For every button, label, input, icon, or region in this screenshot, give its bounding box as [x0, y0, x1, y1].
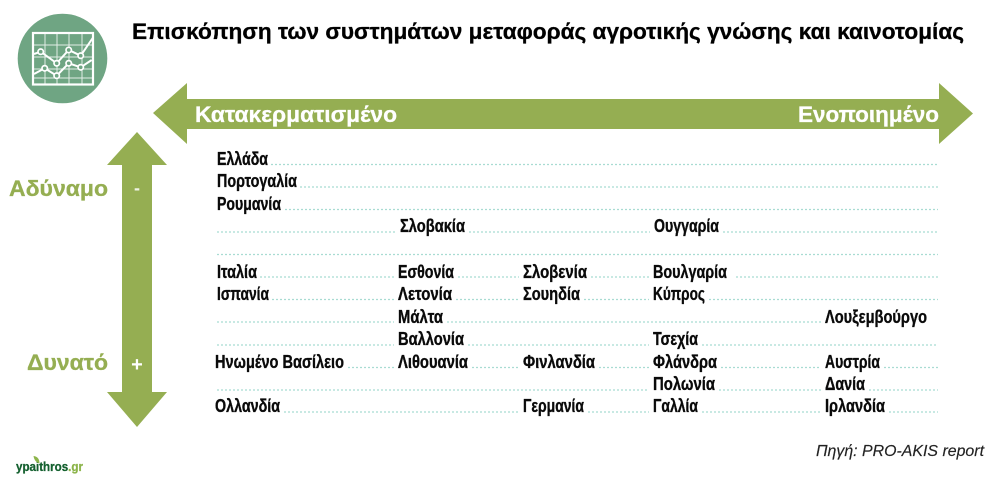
arrow: weak to strong axis [107, 132, 167, 427]
country names matrix: Λουξεμβούργο [825, 307, 927, 328]
logo: ypaithros.gr: ypaithros.gr [16, 459, 83, 474]
label: strong: Δυνατό [27, 350, 108, 375]
country names matrix: Βαλλονία [398, 329, 464, 349]
country names matrix: Ολλανδία [215, 396, 280, 416]
country names matrix: Σλοβακία [400, 216, 465, 236]
country names matrix: Ιρλανδία [825, 396, 885, 416]
arrow: fragmented to unified axis [153, 83, 973, 144]
country names matrix: Πορτογαλία [217, 171, 297, 191]
icon: line chart in green circle [18, 14, 107, 103]
country names matrix: Φινλανδία [523, 352, 595, 372]
country names matrix: Μάλτα [398, 307, 443, 327]
source note: Πηγή: PRO-AKIS report [816, 443, 985, 460]
country names matrix: Ηνωμένο Βασίλειο [215, 352, 344, 372]
axis label: fragmented: Κατακερματισμένο [195, 102, 397, 127]
country names matrix: Πολωνία [653, 374, 715, 394]
country names matrix: Φλάνδρα [653, 352, 717, 372]
country names matrix: Γερμανία [523, 396, 584, 416]
country names matrix: Λιθουανία [398, 352, 468, 372]
country names matrix: Σλοβενία [523, 262, 587, 282]
country names matrix: Δανία [825, 374, 865, 394]
axis label: unified: Ενοποιημένο [798, 102, 939, 127]
dotted row lines [217, 164, 938, 412]
country names matrix: Ισπανία [217, 284, 269, 304]
country names matrix [215, 149, 927, 416]
country names matrix: Ουγγαρία [654, 216, 719, 236]
country names matrix: Ιταλία [217, 262, 257, 282]
country names matrix: Αυστρία [825, 352, 880, 372]
country names matrix: Βουλγαρία [653, 262, 727, 282]
plus sign: + [131, 354, 143, 376]
country names matrix: Τσεχία [653, 329, 698, 349]
country names matrix: Κύπρος [653, 284, 705, 304]
label: weak: Αδύναμο [9, 176, 108, 201]
country names matrix: Γαλλία [653, 396, 698, 416]
country names matrix: Ελλάδα [217, 149, 268, 169]
country names matrix: Ρουμανία [217, 194, 281, 214]
country names matrix: Λετονία [398, 284, 452, 304]
country names matrix: Εσθονία [398, 262, 454, 282]
country names matrix: Σουηδία [523, 284, 580, 304]
minus sign: - [134, 178, 140, 198]
title: Επισκόπηση των συστημάτων μεταφοράς αγροτικής γνώσης και καινοτομίας [132, 19, 964, 44]
